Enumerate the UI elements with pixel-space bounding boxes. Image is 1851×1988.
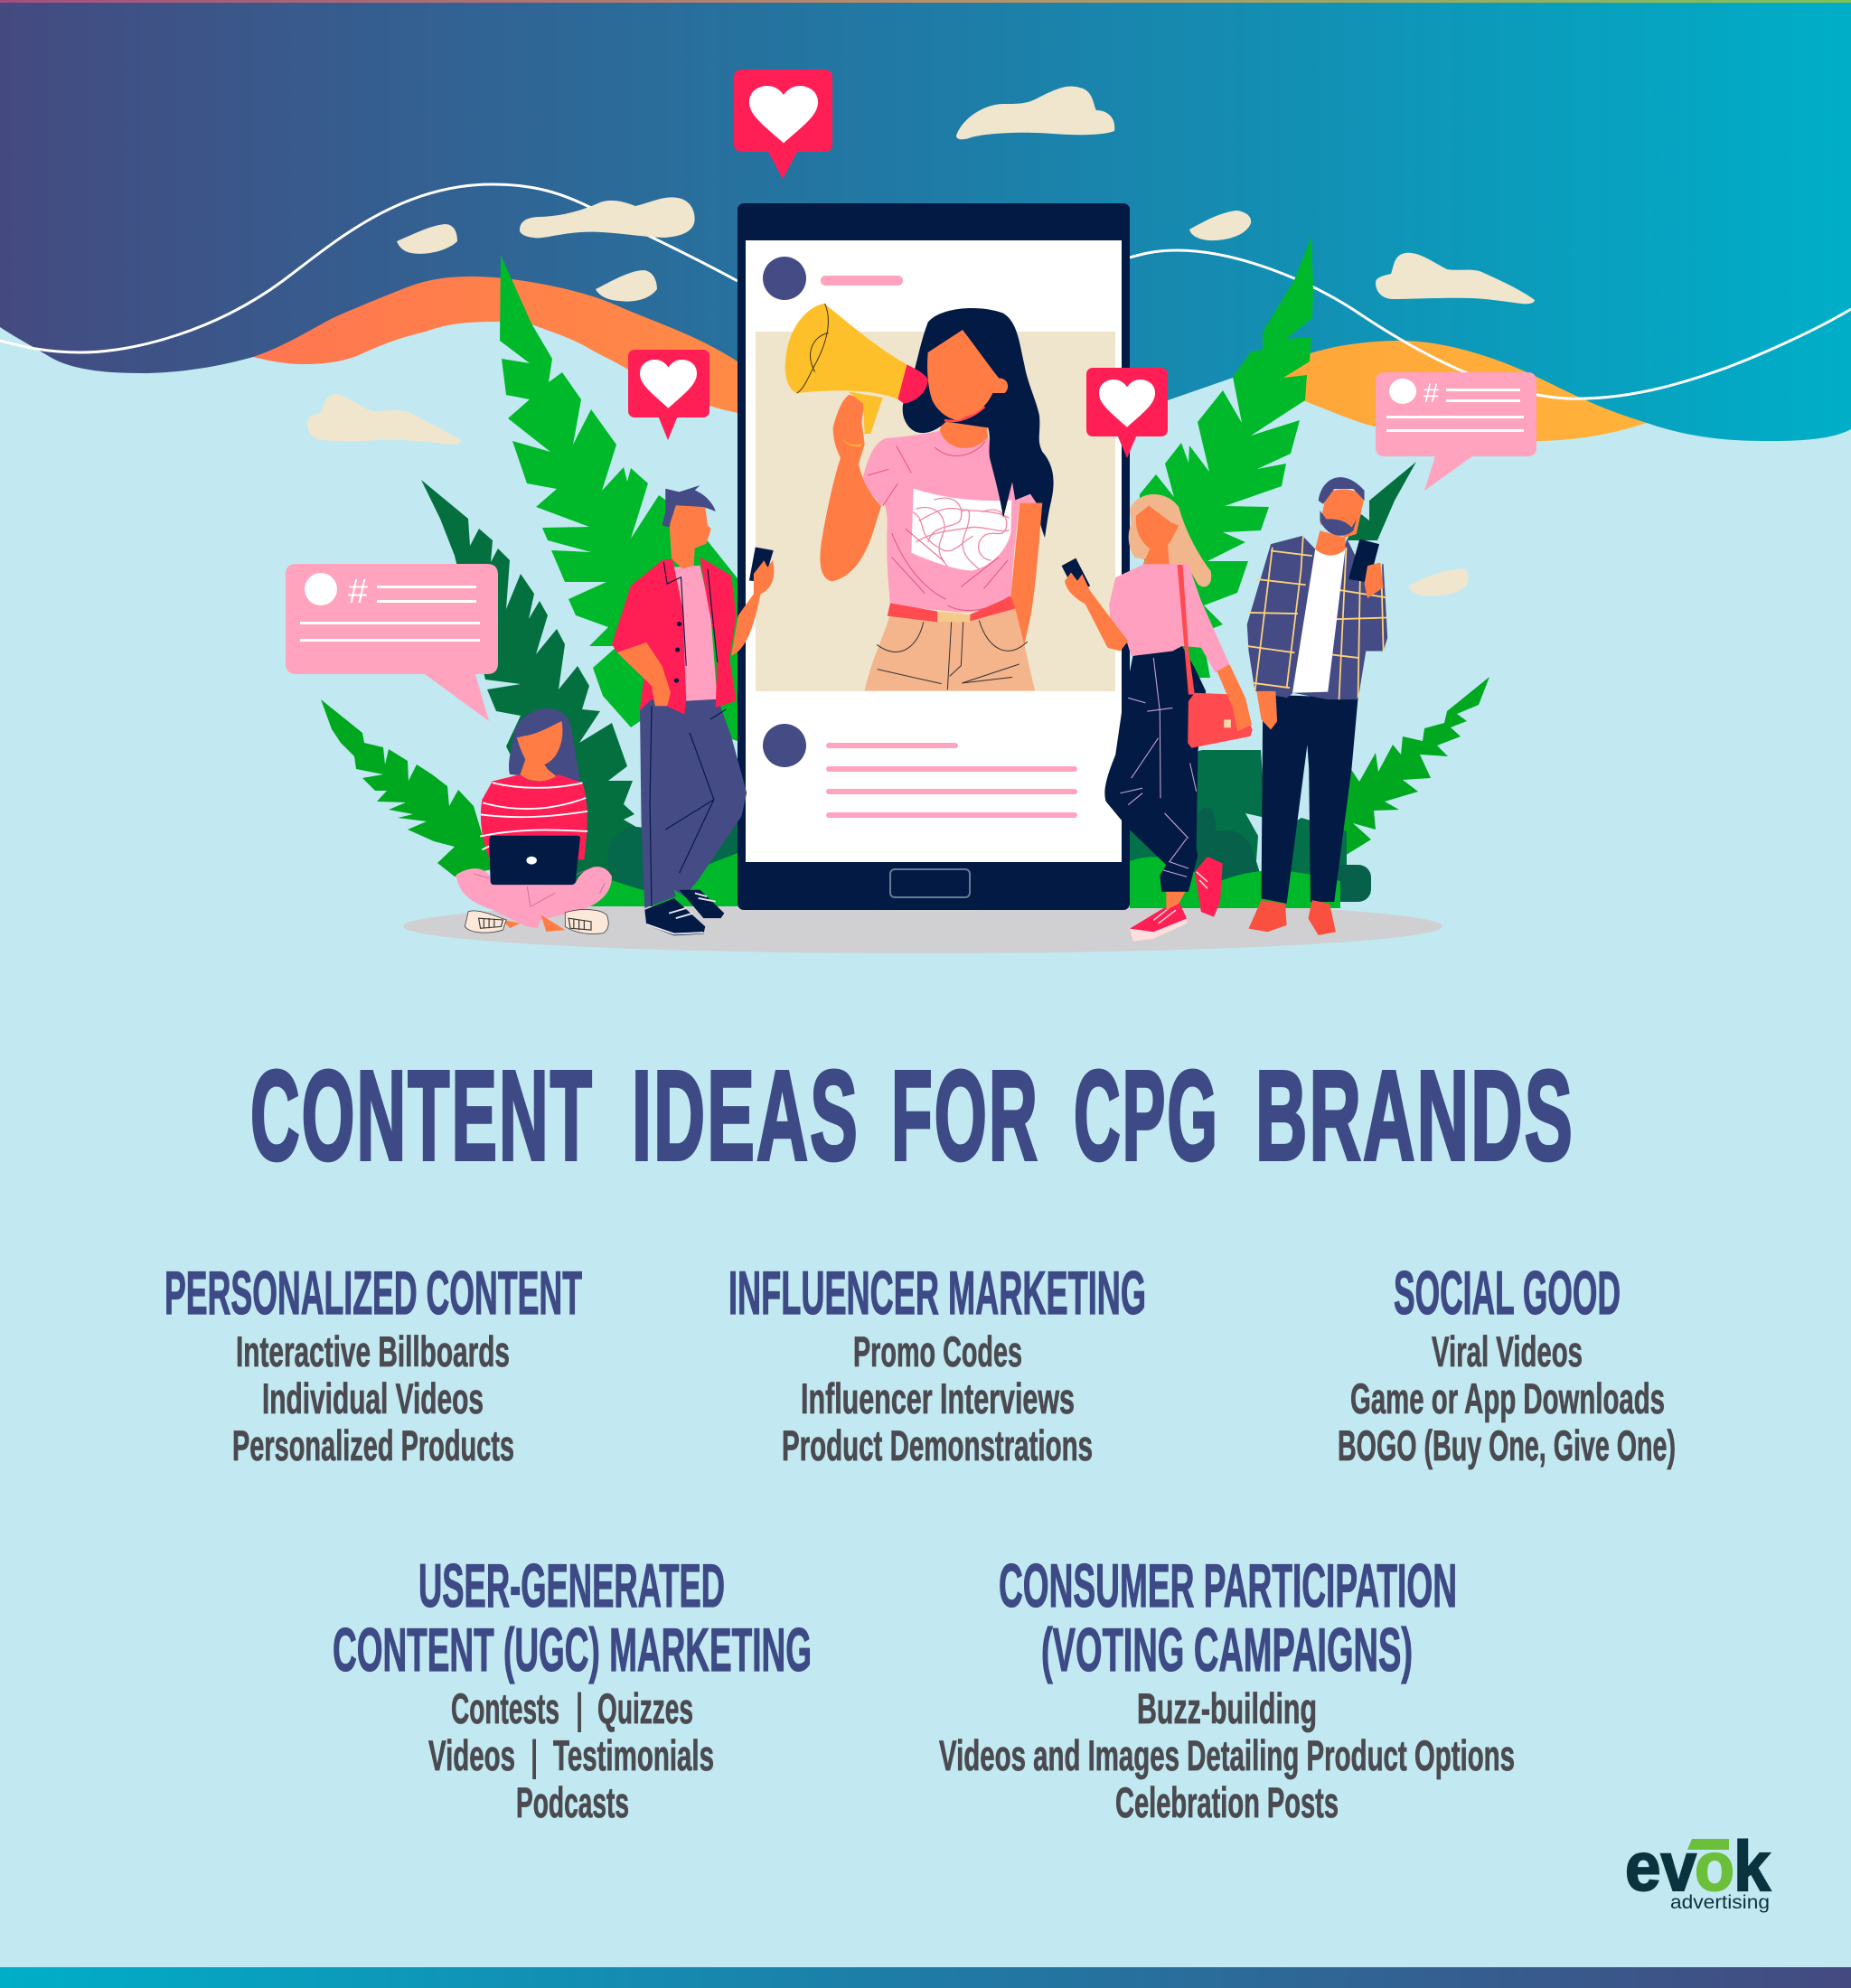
chat bubble left xyxy=(286,564,498,721)
neck xyxy=(938,404,988,449)
avatar bottom xyxy=(763,724,806,767)
bush right xyxy=(1130,750,1265,890)
megaphone cone xyxy=(785,304,907,399)
avatar top xyxy=(763,257,806,300)
hash: # xyxy=(348,573,368,611)
pants xyxy=(1104,646,1206,892)
title: IDEAS xyxy=(632,1044,860,1186)
hand upper xyxy=(1365,562,1384,598)
section: user-generated content: Podcasts xyxy=(516,1778,629,1826)
post photo xyxy=(756,332,1115,691)
shoe back xyxy=(1195,857,1223,917)
logo: ev xyxy=(1625,1829,1696,1906)
phone body xyxy=(738,203,1130,910)
section: influencer marketing: Influencer Interviews xyxy=(801,1374,1075,1422)
shirt xyxy=(1109,564,1229,673)
clouds xyxy=(307,86,1535,595)
pants folds xyxy=(650,706,726,906)
belt xyxy=(888,596,1015,622)
leg folds xyxy=(474,867,605,906)
feet xyxy=(503,914,565,932)
section: consumer participation: Videos and Images Detailing Product Options xyxy=(939,1731,1515,1779)
bubble body xyxy=(286,564,498,721)
ankle xyxy=(1166,892,1185,910)
shirt print xyxy=(911,489,1011,571)
leaf: lower right xyxy=(1340,677,1489,858)
orange hump left xyxy=(253,226,738,413)
bag buckle xyxy=(1224,719,1231,727)
heart pin left xyxy=(628,350,709,440)
white wave line xyxy=(0,184,1851,399)
plaid lines xyxy=(1247,536,1387,699)
shirt folds xyxy=(868,441,1010,611)
shoe right xyxy=(565,910,608,933)
bubble body xyxy=(1376,372,1536,491)
woman with bag xyxy=(1062,494,1253,942)
leaf: dark right small xyxy=(1347,462,1416,540)
bubble lines xyxy=(1386,389,1524,432)
leaf: right upper xyxy=(1139,237,1313,678)
section: user-generated content: | xyxy=(574,1684,585,1732)
section: influencer marketing xyxy=(728,1259,1146,1469)
laptop xyxy=(489,836,580,885)
shirt scribbles xyxy=(913,498,1010,569)
forearm in pocket xyxy=(617,642,671,706)
shirt xyxy=(861,431,1042,613)
tee xyxy=(672,566,718,701)
megaphone lines xyxy=(797,304,829,393)
phone xyxy=(738,203,1130,910)
shoe laces xyxy=(1153,872,1207,924)
bubble avatar xyxy=(305,573,337,605)
section: consumer participation: CONSUMER PARTICIPATION xyxy=(999,1552,1457,1620)
section: personalized content: Interactive Billboards xyxy=(236,1327,510,1375)
section: user-generated content: Testimonials xyxy=(553,1731,714,1779)
section: user-generated content: CONTENT (UGC) MARKETING xyxy=(333,1616,812,1684)
leaves xyxy=(321,237,1489,908)
bush rounded right xyxy=(1329,865,1371,902)
section: social good: Game or App Downloads xyxy=(1350,1374,1665,1422)
megaphone handle xyxy=(848,391,883,434)
caption lines xyxy=(826,743,1077,818)
face xyxy=(1136,506,1179,552)
section: consumer participation: Buzz-building xyxy=(1137,1684,1317,1732)
shoes xyxy=(1249,900,1336,935)
pants xyxy=(640,696,747,908)
title: BRANDS xyxy=(1255,1044,1574,1186)
title: CPG xyxy=(1074,1044,1219,1186)
bush between legs xyxy=(1270,818,1347,890)
home button xyxy=(890,869,970,897)
bearded man xyxy=(1247,477,1387,935)
chat bubble right xyxy=(1376,372,1536,491)
section: personalized content: Personalized Products xyxy=(232,1421,514,1469)
leaf: lower left xyxy=(321,699,493,877)
shoes xyxy=(644,890,724,935)
neck xyxy=(1315,530,1346,556)
title xyxy=(250,1044,1574,1186)
hair xyxy=(509,708,581,781)
collar lines xyxy=(663,562,718,666)
bag strap xyxy=(1178,565,1195,695)
shirt buttons xyxy=(674,622,681,683)
top strip xyxy=(0,0,1851,3)
bubble lines xyxy=(300,586,480,642)
heart pin top xyxy=(734,70,832,179)
section: consumer participation: (VOTING CAMPAIGNS) xyxy=(1041,1616,1413,1684)
gradient sky wave xyxy=(0,0,1851,441)
arm with phone xyxy=(1065,573,1128,651)
arm with phone xyxy=(731,560,774,656)
ground shadow xyxy=(403,899,1442,953)
base green right xyxy=(1130,857,1340,908)
section: personalized content: PERSONALIZED CONTENT xyxy=(164,1259,582,1327)
section: personalized content: Individual Videos xyxy=(262,1374,484,1422)
finger grip xyxy=(842,438,863,446)
title: CONTENT xyxy=(250,1044,594,1186)
section: social good: Viral Videos xyxy=(1432,1327,1583,1375)
shoe left xyxy=(465,911,506,933)
leaf: tall bright left xyxy=(500,255,738,741)
neck shadow xyxy=(944,407,984,421)
pants lines xyxy=(877,621,1028,689)
woman with megaphone xyxy=(785,304,1054,690)
shoe laces xyxy=(479,918,591,930)
section: influencer marketing: INFLUENCER MARKETING xyxy=(728,1259,1146,1327)
username bar xyxy=(821,276,903,286)
hair xyxy=(662,485,716,527)
pants seams xyxy=(1120,658,1197,877)
section: consumer participation xyxy=(939,1552,1515,1826)
sweater xyxy=(481,774,587,859)
hash: # xyxy=(1423,379,1439,408)
neck xyxy=(1142,544,1170,566)
bottom bar xyxy=(0,1967,1851,1988)
face xyxy=(927,330,1008,420)
orange hump right xyxy=(1283,271,1647,441)
shoe front xyxy=(1130,902,1187,941)
face and neck xyxy=(517,721,562,782)
legs xyxy=(456,867,612,928)
laptop logo xyxy=(526,857,537,865)
pants xyxy=(1262,695,1358,904)
section: consumer participation: Celebration Posts xyxy=(1115,1778,1339,1826)
arm raised xyxy=(820,395,881,581)
shirt right xyxy=(700,558,737,708)
section: social good xyxy=(1338,1259,1676,1469)
bubble avatar xyxy=(1389,379,1416,404)
title: FOR xyxy=(891,1044,1039,1186)
megaphone neck xyxy=(897,364,928,404)
logo xyxy=(1625,1826,1771,1913)
shirt xyxy=(612,558,686,714)
hair xyxy=(1319,477,1365,504)
hand lower xyxy=(1256,691,1277,729)
arm with bag xyxy=(1217,664,1252,731)
section: user-generated content: USER-GENERATED xyxy=(418,1552,725,1620)
section: user-generated content: Contests xyxy=(451,1684,559,1732)
bush behind man xyxy=(607,795,738,890)
base green left xyxy=(584,853,738,906)
man with phone, left xyxy=(612,485,774,935)
phone screen xyxy=(746,240,1122,862)
hair xyxy=(1129,494,1211,586)
tee xyxy=(1292,549,1346,693)
section: influencer marketing: Product Demonstrations xyxy=(782,1421,1093,1469)
logo: k xyxy=(1734,1826,1771,1906)
pants xyxy=(865,608,1035,690)
bush rounded middle xyxy=(1193,807,1259,908)
logo: advertising xyxy=(1670,1892,1770,1913)
hair xyxy=(903,308,1054,538)
face xyxy=(1320,489,1365,538)
beard xyxy=(1320,511,1357,536)
jacket xyxy=(1247,536,1387,699)
logo: o xyxy=(1695,1829,1734,1906)
section: social good: SOCIAL GOOD xyxy=(1394,1259,1621,1327)
section: user-generated content xyxy=(333,1552,812,1826)
section: personalized content xyxy=(164,1259,582,1469)
bag xyxy=(1188,693,1253,748)
section: user-generated content: Videos xyxy=(428,1731,515,1779)
heart pin right xyxy=(1086,368,1168,458)
sweater stripes xyxy=(480,783,587,849)
leaf: dark left xyxy=(421,480,643,890)
arm on hip xyxy=(1006,503,1042,644)
section: user-generated content: Quizzes xyxy=(597,1684,693,1732)
phone xyxy=(1062,558,1090,594)
phone xyxy=(1348,539,1379,583)
section: influencer marketing: Promo Codes xyxy=(853,1327,1022,1375)
shoe sole xyxy=(1130,918,1187,942)
neck and face xyxy=(670,502,711,569)
phone xyxy=(749,547,774,582)
girl with laptop xyxy=(456,708,612,933)
section: user-generated content: | xyxy=(529,1731,540,1779)
